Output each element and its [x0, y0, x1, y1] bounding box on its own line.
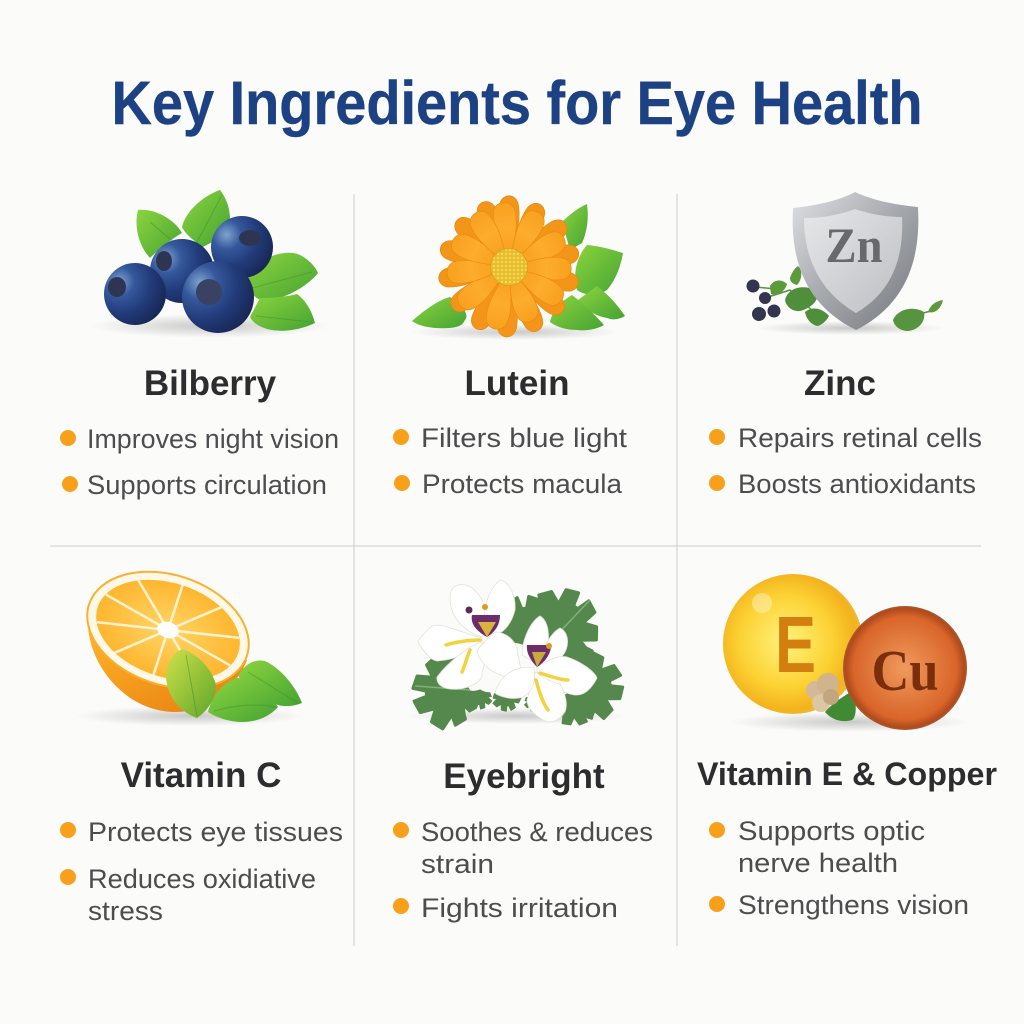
heading: Bilberry: Bilberry	[144, 364, 277, 403]
heading: Vitamin C: Vitamin C	[121, 756, 281, 795]
panel: Vitamin E & Copper	[697, 574, 997, 920]
icon: vitamin E and copper spheres	[723, 574, 970, 732]
panel: Zinc	[709, 192, 982, 499]
icon: zinc shield	[746, 192, 945, 335]
bullet list: Vitamin E & Copper	[709, 816, 969, 920]
bullet list: Bilberry: Supports circulation	[87, 470, 327, 500]
heading: Zinc: Zinc	[804, 364, 876, 403]
bullet list: Eyebright: Soothes & reduces	[421, 817, 653, 847]
bullet list: Vitamin C: Reduces oxidiative	[88, 864, 316, 894]
panel: Bilberry	[60, 190, 339, 500]
panel: Vitamin C	[60, 552, 343, 926]
grid dividers	[50, 194, 981, 946]
bullet list: Lutein: Filters blue light	[421, 423, 628, 453]
icon: white flowers and foliage	[407, 575, 627, 735]
bullet list: Vitamin E & Copper: Supports optic	[738, 816, 925, 846]
bullet list: Bilberry: Improves night vision	[87, 424, 339, 454]
bullet list: Zinc: Repairs retinal cells	[738, 423, 982, 453]
bullet list: Vitamin E & Copper: Strengthens vision	[738, 890, 969, 920]
bullet list: Zinc	[709, 423, 982, 499]
panel: Lutein	[393, 196, 628, 499]
icon: bilberries and leaves	[90, 190, 330, 338]
panel: Eyebright	[393, 575, 653, 923]
bullet list: Vitamin C: stress	[88, 896, 163, 926]
bullet list: Lutein: Protects macula	[422, 469, 623, 499]
icon: zinc shield: Zn	[826, 217, 883, 273]
heading: Lutein: Lutein	[465, 364, 569, 403]
bullet list: Vitamin C	[60, 817, 343, 926]
bullet list: Eyebright	[393, 817, 653, 923]
bullet list: Bilberry	[60, 424, 339, 500]
heading: Vitamin E & Copper: Vitamin E & Copper	[697, 756, 997, 792]
icon: orange flower	[410, 196, 625, 340]
icon: vitamin E and copper spheres: E	[775, 600, 816, 689]
bullet list: Eyebright: strain	[421, 849, 494, 879]
icon: vitamin E and copper spheres: Cu	[872, 638, 938, 703]
bullet list: Zinc: Boosts antioxidants	[738, 469, 976, 499]
bullet list: Eyebright: Fights irritation	[421, 893, 618, 923]
heading: Eyebright: Eyebright	[443, 757, 605, 796]
bullet list: Vitamin C: Protects eye tissues	[88, 817, 343, 847]
title: Key Ingredients for Eye Health	[112, 69, 922, 137]
icon: orange half and leaves	[72, 552, 305, 726]
bullet list: Vitamin E & Copper: nerve health	[738, 848, 898, 878]
bullet list: Lutein	[393, 423, 628, 499]
